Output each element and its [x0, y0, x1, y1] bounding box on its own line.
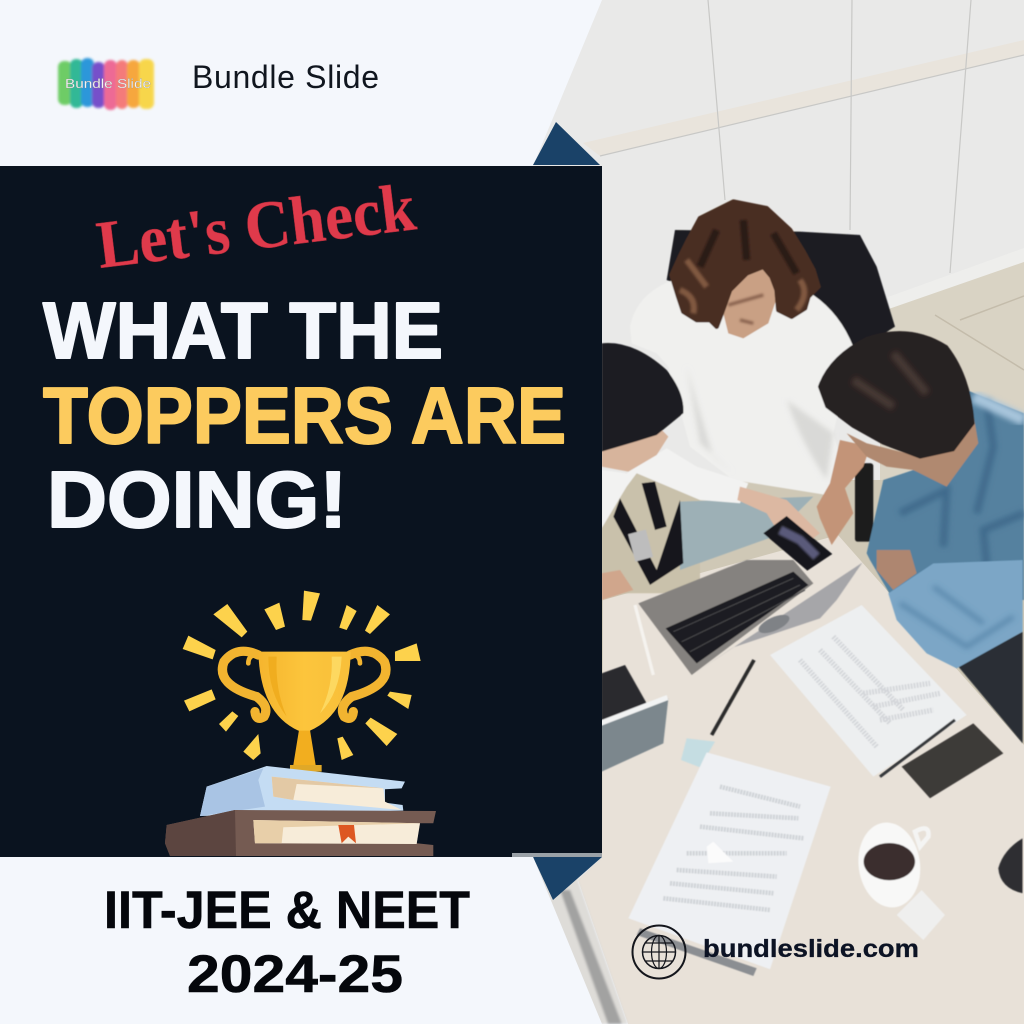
chair back: [667, 230, 895, 353]
logo: watercolor brush mark: Bundle Slide: [65, 76, 151, 91]
right student's dark trousers: [958, 632, 1023, 743]
bottom light panel: [0, 857, 602, 1024]
laptop deck: [638, 560, 813, 675]
dark chair leg: [855, 463, 873, 542]
bookmark: [338, 825, 356, 843]
photo: students studying around a table: [530, 0, 1024, 1024]
floor and bag under table: [602, 473, 700, 593]
earbuds: [707, 842, 733, 863]
right student's denim sleeve: [888, 560, 1023, 668]
trophy handles: [222, 651, 386, 718]
right student's denim jacket: [867, 390, 1024, 600]
strip under dark panel: [512, 853, 602, 857]
backpack straps: [613, 482, 683, 585]
photo: table top: [578, 535, 1024, 1024]
laptop keyboard: [666, 572, 808, 663]
computer mouse: [998, 838, 1023, 893]
dark main panel: [0, 166, 602, 857]
skin of lower-left hand: [602, 570, 633, 600]
trophy cup: [258, 652, 351, 731]
right student's neck and ear: [847, 413, 978, 487]
tablet keyboard: [602, 665, 647, 723]
sticky note: [681, 738, 715, 767]
photo: office wall: [530, 0, 1024, 620]
left student's hand: [737, 487, 820, 538]
headline: [43, 286, 566, 544]
coaster: [897, 890, 945, 940]
exam paper in the centre: [628, 752, 831, 969]
black pen: [712, 660, 754, 735]
footer line 1: IIT-JEE & NEET: [104, 881, 470, 940]
left student's dark hair: [602, 343, 683, 452]
pointing arm: [817, 440, 870, 545]
photo: floor strip at bottom left: [533, 857, 628, 1024]
pen beside paper: [880, 720, 955, 777]
brand name: Bundle Slide: [192, 59, 379, 95]
top light panel: [0, 0, 602, 166]
smartphone on table: [763, 516, 832, 571]
right student's dark hair: [819, 332, 973, 457]
bag logo patch: [628, 530, 653, 562]
icon: globe: [632, 926, 686, 978]
smartphone on table right: [902, 723, 1003, 798]
long-haired man's face: [722, 265, 778, 338]
bottom brown book: [165, 810, 436, 856]
footer line 2: 2024-25: [187, 945, 403, 1004]
top blue book: [200, 766, 405, 816]
footer heading: [104, 881, 470, 1004]
trophy stem: [293, 730, 316, 765]
trophy rays: [183, 591, 421, 760]
long curly hair: [672, 202, 818, 327]
icon: trophy on books: [165, 591, 436, 856]
headline line 3: DOING!: [47, 455, 347, 544]
coffee cup: [853, 818, 928, 911]
headline line 2: TOPPERS ARE: [43, 371, 566, 460]
left student's face: [602, 428, 668, 472]
bottom blue triangle accent: [533, 857, 602, 900]
white t-shirt: [630, 280, 853, 495]
tablet stand: [602, 698, 668, 772]
website url: bundleslide.com: [703, 935, 919, 963]
silver pen: [637, 928, 757, 976]
logo: watercolor brush mark: [58, 58, 154, 110]
right student's wrist: [877, 550, 917, 590]
laptop logo: [756, 611, 792, 637]
laptop lid: [692, 563, 862, 675]
photo: floor behind table: [602, 480, 1024, 860]
exam paper on the right: [770, 605, 967, 777]
laptop screen reflection: [680, 497, 813, 570]
left student's sleeve: [602, 448, 748, 528]
top blue triangle accent: [533, 122, 600, 165]
white stylus pen: [635, 605, 653, 675]
headline line 1: WHAT THE: [43, 286, 443, 375]
headline script: Let's Check: Let's Check: [93, 168, 420, 283]
